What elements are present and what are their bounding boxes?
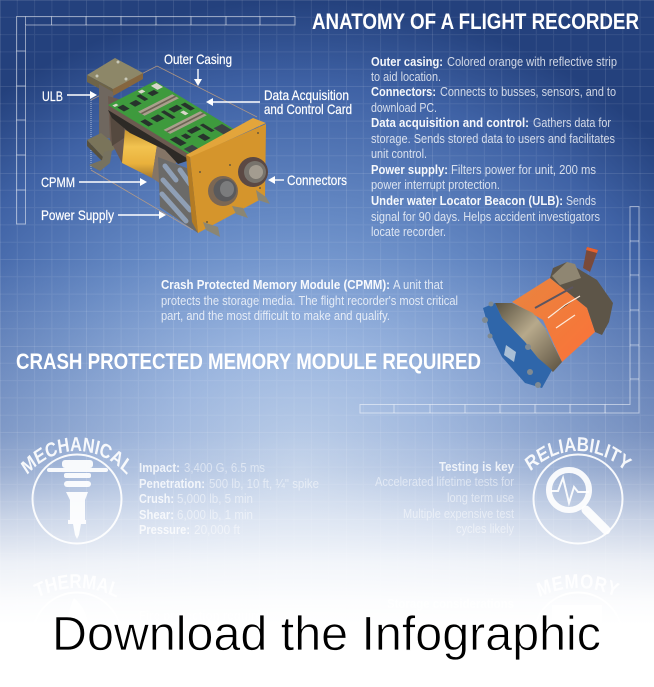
label: Power Supply — [41, 207, 166, 223]
component descriptions: Connectors: — [371, 84, 436, 99]
mechanical requirements: Penetration: — [139, 476, 205, 491]
component descriptions: Colored orange with reflective strip — [447, 54, 617, 69]
orange end plate — [186, 118, 266, 233]
component descriptions: Outer casing: — [371, 54, 443, 69]
mechanical requirements: 5,000 lb, 5 min — [177, 491, 253, 506]
component descriptions: Filters power for unit, 200 ms — [451, 162, 596, 177]
mechanical requirements: Shear: — [139, 507, 174, 522]
outer casing outline — [91, 66, 257, 230]
mechanical requirements: Impact: — [139, 460, 180, 475]
CPMM photo — [482, 247, 613, 388]
CPMM cylinder — [122, 130, 180, 186]
data acquisition card — [108, 81, 237, 155]
mechanical requirements — [139, 460, 319, 537]
icon: reliability badge: RELIABILITY — [524, 437, 632, 471]
label: Data Acquisition and Control Card: and Control Card — [264, 101, 352, 117]
heading: crash protected memory module required: CRASH PROTECTED MEMORY MODULE REQUIRED — [16, 349, 481, 374]
component descriptions: unit control. — [371, 146, 427, 161]
icon: thermal badge: THERMAL — [35, 574, 114, 586]
thermal text: Fire protection required — [139, 608, 269, 623]
CPMM description: protects the storage media. The flight recorder's most critical — [161, 293, 458, 308]
component descriptions: locate recorder. — [371, 224, 446, 239]
component descriptions: signal for 90 days. Helps accident investigators — [371, 209, 600, 224]
connectors — [208, 157, 268, 206]
component descriptions: power interrupt protection. — [371, 177, 500, 192]
reliability text — [375, 459, 515, 536]
mechanical requirements: 500 lb, 10 ft, ¼" spike — [209, 476, 319, 491]
label: CPMM: CPMM — [41, 174, 75, 190]
mechanical requirements: 3,400 G, 6.5 ms — [184, 460, 265, 475]
mechanical requirements: Pressure: — [139, 522, 190, 537]
CPMM description — [161, 277, 458, 323]
power supply — [158, 157, 198, 233]
memory text: Storage considerations — [387, 596, 514, 611]
reliability text: long term use — [447, 490, 514, 505]
mechanical requirements: 20,000 ft — [194, 522, 240, 537]
label: Outer Casing — [164, 51, 232, 86]
icon: memory badge: MEMORY — [537, 574, 620, 588]
icon: mechanical badge — [20, 437, 130, 544]
icon: reliability badge — [524, 437, 632, 544]
component descriptions: storage. Sends stored data to users and facilitates — [371, 131, 615, 146]
icon: thermal badge — [35, 574, 114, 586]
component descriptions: download PC. — [371, 100, 437, 115]
mounting feet — [203, 190, 270, 237]
CPMM description: part, and the most difficult to make and qualify. — [161, 308, 390, 323]
label: Outer Casing: Outer Casing — [164, 51, 232, 67]
CPMM description: Crash Protected Memory Module (CPMM): — [161, 277, 390, 292]
component descriptions: Gathers data for — [533, 115, 612, 130]
flight recorder illustration — [87, 58, 270, 237]
component descriptions — [371, 54, 617, 239]
label: ULB: ULB — [42, 88, 63, 104]
CPMM description: A unit that — [393, 277, 443, 292]
component descriptions: to aid location. — [371, 69, 441, 84]
reliability text: Accelerated lifetime tests for — [375, 474, 515, 489]
reliability text: Testing is key — [439, 459, 515, 474]
ruler: bottom right — [360, 206, 639, 413]
component descriptions: Under water Locator Beacon (ULB): — [371, 193, 563, 208]
ULB bracket — [87, 58, 143, 171]
icon: mechanical badge: MECHANICAL — [20, 437, 130, 475]
label: CPMM — [41, 174, 147, 190]
icon: memory badge — [537, 574, 620, 588]
label: Power Supply: Power Supply — [41, 207, 114, 223]
reliability text: cycles likely — [456, 521, 514, 536]
download call to action: Download the Infographic — [52, 608, 601, 661]
ruler: top left — [16, 16, 295, 224]
label: Data Acquisition and Control Card: Data Acquisition — [264, 87, 349, 103]
label: ULB — [42, 88, 97, 104]
reliability text: Multiple expensive test — [403, 506, 514, 521]
component descriptions: Sends — [566, 193, 596, 208]
component descriptions: Connects to busses, sensors, and to — [440, 84, 616, 99]
mechanical requirements: Crush: — [139, 491, 174, 506]
label: Connectors: Connectors — [287, 172, 347, 188]
label: Connectors — [268, 172, 347, 188]
label: Data Acquisition and Control Card — [206, 87, 352, 117]
component descriptions: Data acquisition and control: — [371, 115, 529, 130]
mechanical requirements: 6,000 lb, 1 min — [177, 507, 253, 522]
component descriptions: Power supply: — [371, 162, 448, 177]
